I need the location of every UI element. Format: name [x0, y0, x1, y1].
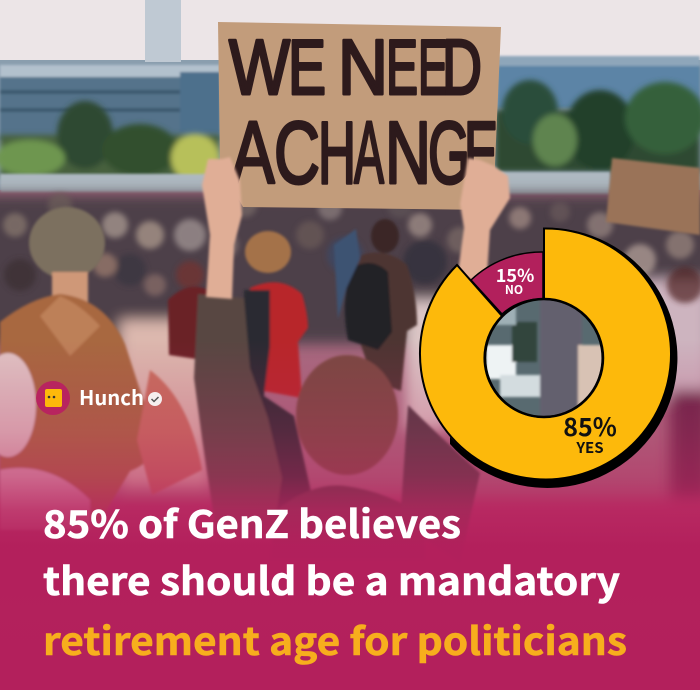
headline: 85% of GenZ believes	[43, 494, 461, 549]
icon: hunch logo	[36, 381, 70, 415]
sign text: N	[385, 103, 431, 202]
sign text: G	[428, 103, 470, 202]
left sleeve	[194, 294, 282, 538]
backpack person	[371, 219, 399, 253]
yes label: 85%	[563, 408, 617, 444]
sign text: N	[338, 23, 388, 111]
person hair centre	[296, 355, 398, 475]
sign text: D	[442, 23, 482, 111]
no label: 15%	[496, 262, 534, 288]
headline: there should be a mandatory	[43, 551, 620, 606]
no label: NO	[505, 281, 523, 298]
headline	[43, 494, 627, 666]
donut chart	[420, 228, 677, 488]
crowd blur	[0, 194, 700, 600]
protest sign	[218, 22, 501, 210]
sign text: A	[231, 103, 275, 202]
yes slice 85%	[420, 228, 671, 479]
sign text: W	[229, 23, 290, 111]
sign text	[229, 23, 498, 202]
yes label: YES	[575, 437, 604, 458]
sign text: E	[386, 23, 418, 111]
sign text: E	[464, 103, 498, 202]
headline: retirement age for politicians	[43, 611, 627, 666]
sign text: A	[354, 103, 384, 202]
brand name: Hunch	[79, 382, 144, 411]
brand logo	[36, 381, 162, 415]
sign text: C	[274, 103, 320, 202]
icon: verified badge	[148, 392, 162, 406]
donut hole photo	[484, 296, 604, 420]
woman in red shirt	[245, 231, 291, 273]
distant sign	[606, 158, 700, 235]
sign text: H	[318, 103, 356, 202]
sign text: E	[418, 23, 448, 111]
no slice 15%	[471, 252, 543, 314]
blue shirt person	[334, 229, 360, 319]
raised arms and hands	[202, 157, 510, 299]
donut shadow	[450, 228, 677, 488]
brown jacket person	[29, 207, 105, 279]
pink gradient overlay	[0, 340, 700, 690]
donut inner ring	[485, 299, 603, 417]
sign text: E	[288, 23, 326, 111]
